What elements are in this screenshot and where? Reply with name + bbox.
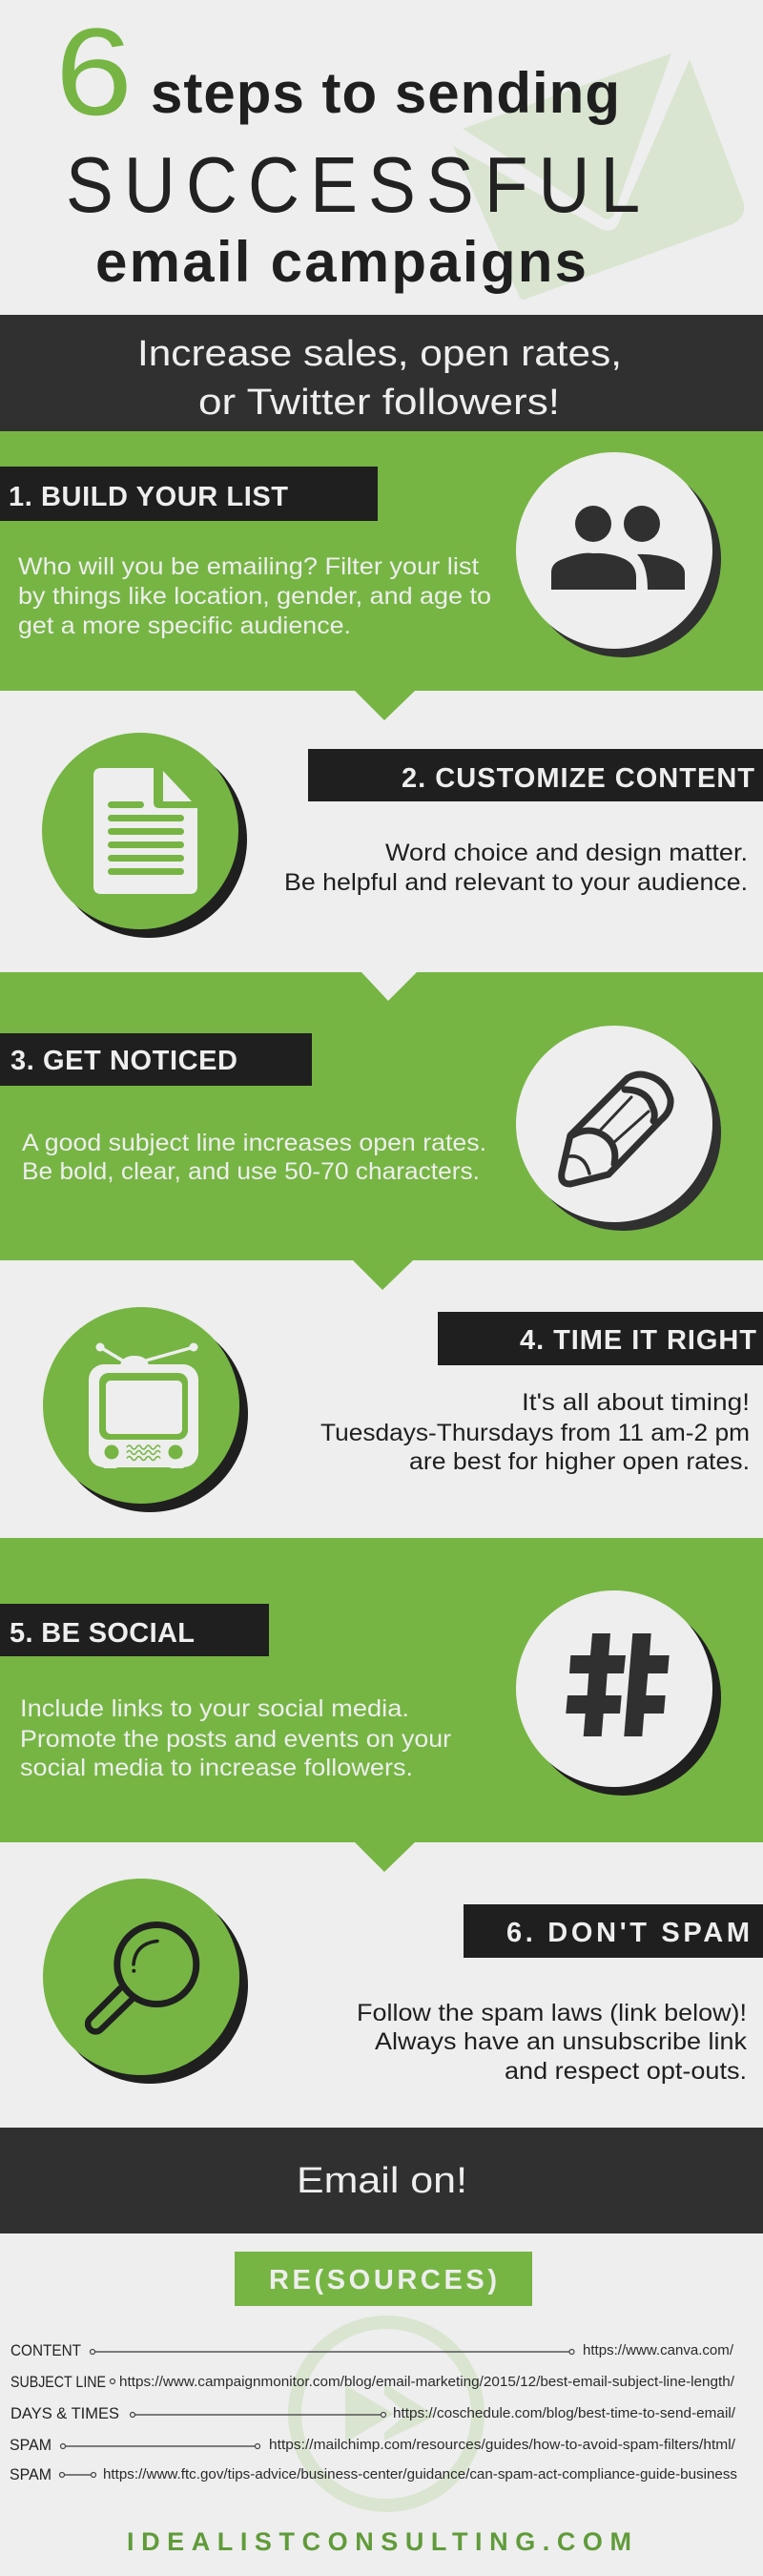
title: [55, 2, 640, 294]
resource: days and times: DAYS & TIMES: [10, 2404, 119, 2422]
panel: step 4 time it right: [43, 1307, 763, 1512]
text: step 3 body: Be bold, clear, and use 50-70 characters.: [22, 1158, 480, 1185]
text: step 5 body: Promote the posts and events on your: [20, 1726, 451, 1753]
list: resource links: [10, 2341, 737, 2483]
resource: days and times: https://coschedule.com/blog/best-time-to-send-email/: [393, 2405, 736, 2421]
banner: subtitle: Increase sales, open rates,: [137, 334, 622, 374]
text: step 1 body: by things like location, gender, and age to: [18, 583, 491, 610]
banner: email on: Email on!: [297, 2161, 467, 2201]
heading: step 5: 5. BE SOCIAL: [10, 1618, 195, 1649]
resource: spam filters: https://mailchimp.com/resources/guides/how-to-avoid-spam-filters/html/: [269, 2437, 736, 2453]
icon: envelope watermark: [453, 53, 744, 300]
heading: step 3: 3. GET NOTICED: [10, 1046, 237, 1076]
text: step 6 body: and respect opt-outs.: [505, 2058, 747, 2085]
heading: step 6: 6. DON'T SPAM: [506, 1918, 750, 1948]
resource: days and times: [10, 2404, 736, 2422]
resource: subject line: https://www.campaignmonitor.com/blog/email-marketing/2015/12/best-email-subject-line-length/: [119, 2374, 735, 2390]
title: line one: steps to sending: [151, 61, 620, 125]
text: step 5 body: [20, 1695, 451, 1781]
panel: step 1 build your list: [0, 431, 763, 720]
banner: subtitle: or Twitter followers!: [198, 383, 560, 423]
icon: play watermark: [295, 2322, 478, 2505]
text: step 4 body: Tuesdays-Thursdays from 11 am-2 pm: [320, 1420, 750, 1446]
text: step 2 body: Word choice and design matter.: [385, 840, 748, 866]
resource: spam filters: SPAM: [10, 2436, 52, 2454]
text: step 1 body: Who will you be emailing? Filter your list: [18, 553, 479, 580]
title: big six: 6: [55, 2, 133, 141]
banner: subtitle: [0, 315, 763, 431]
banner: email on: [0, 2128, 763, 2233]
text: step 2 body: [284, 840, 748, 896]
icon: document: [42, 733, 247, 938]
panel: step 6 don't spam: [43, 1879, 763, 2085]
icon: magnifying glass: [43, 1879, 248, 2084]
heading: step 2: [308, 749, 763, 801]
heading: step 1: [0, 467, 378, 521]
heading: step 5: [0, 1604, 269, 1656]
resource: spam law: https://www.ftc.gov/tips-advice/business-center/guidance/can-spam-act-compliance-guide-business: [103, 2466, 737, 2483]
resource: spam filters: [10, 2436, 736, 2454]
text: step 1 body: get a more specific audience.: [18, 613, 351, 639]
text: step 4 body: It's all about timing!: [522, 1389, 750, 1416]
text: step 4 body: [320, 1389, 750, 1475]
text: step 1 body: [18, 553, 491, 639]
text: step 3 body: A good subject line increases open rates.: [22, 1130, 486, 1156]
heading: step 4: 4. TIME IT RIGHT: [520, 1325, 756, 1356]
heading: resources: RE(SOURCES): [269, 2265, 497, 2296]
text: step 4 body: are best for higher open rates.: [409, 1448, 750, 1475]
icon: hashtag: [516, 1590, 721, 1796]
footer: website: IDEALISTCONSULTING.COM: [127, 2527, 631, 2556]
text: step 5 body: social media to increase followers.: [20, 1755, 413, 1781]
text: step 6 body: Always have an unsubscribe link: [375, 2028, 748, 2055]
text: step 2 body: Be helpful and relevant to your audience.: [284, 869, 748, 896]
text: step 6 body: [357, 2000, 748, 2085]
text: step 6 body: Follow the spam laws (link below)!: [357, 2000, 747, 2026]
resource: spam law: SPAM: [10, 2465, 52, 2483]
resource: subject line: SUBJECT LINE: [10, 2373, 106, 2391]
resource: content: https://www.canva.com/: [583, 2342, 734, 2358]
heading: resources: [235, 2252, 532, 2306]
icon: pencil: [516, 1026, 721, 1231]
title: line three: email campaigns: [95, 230, 587, 294]
heading: step 3: [0, 1033, 312, 1086]
text: step 5 body: Include links to your social media.: [20, 1695, 409, 1722]
icon: people: [516, 452, 721, 657]
heading: step 1: 1. BUILD YOUR LIST: [9, 482, 288, 512]
heading: step 4: [438, 1312, 763, 1365]
text: step 3 body: [22, 1130, 486, 1185]
panel: step 5 be social: [0, 1538, 763, 1872]
heading: step 2: 2. CUSTOMIZE CONTENT: [402, 763, 754, 794]
icon: television: [43, 1307, 248, 1512]
heading: step 6: [464, 1904, 763, 1958]
resource: content: CONTENT: [10, 2341, 81, 2359]
title: line two: SUCCESSFUL: [66, 140, 640, 229]
resource: content: [10, 2341, 734, 2359]
panel: step 3 get noticed: [0, 972, 763, 1290]
panel: step 2 customize content: [42, 733, 763, 938]
